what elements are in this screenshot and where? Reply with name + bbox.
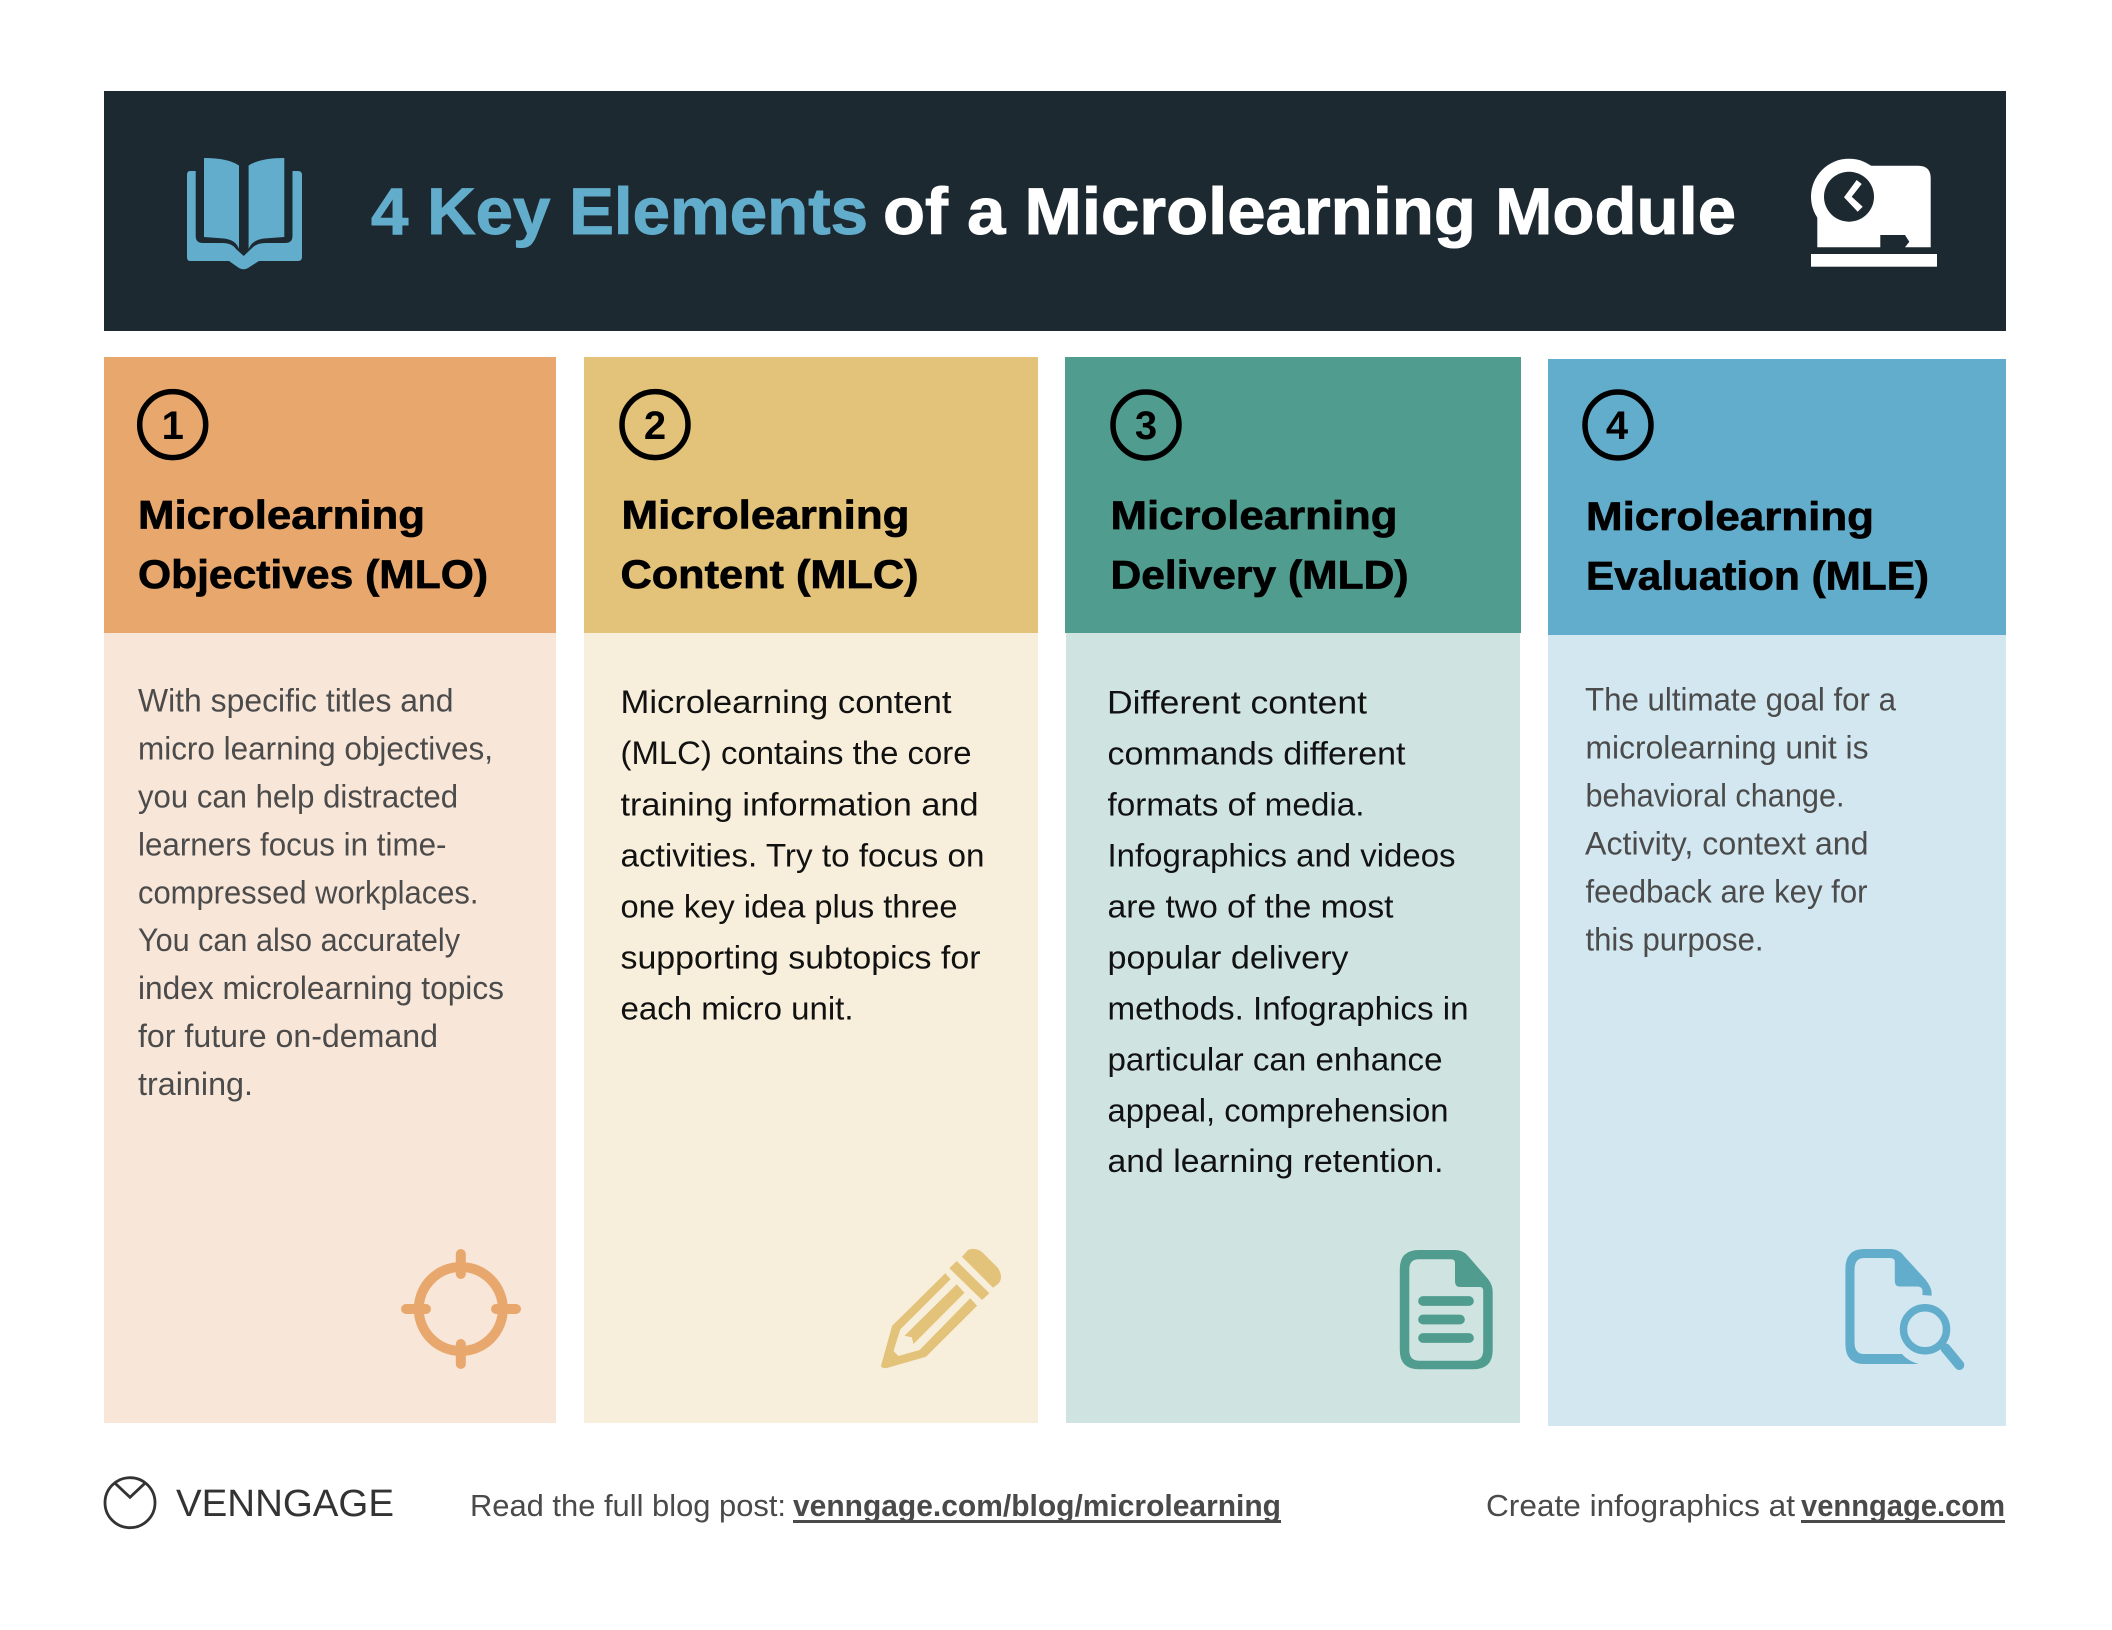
icon: document with magnifier	[1845, 1249, 1959, 1365]
number badge 3	[1113, 392, 1179, 458]
body text: objectives: You can also accurately	[138, 922, 460, 958]
body text: delivery: Infographics and videos	[1108, 837, 1456, 873]
heading: evaluation: Evaluation (MLE)	[1586, 554, 1929, 598]
body text: evaluation: behavioral change.	[1586, 778, 1844, 814]
body text: delivery: are two of the most	[1108, 888, 1394, 924]
body text: content: Microlearning content	[620, 684, 952, 720]
body text: delivery: commands different	[1108, 735, 1406, 771]
body text: evaluation: feedback are key for	[1586, 874, 1868, 910]
venngage logo	[105, 1478, 394, 1528]
number badge 2: 2	[644, 404, 666, 448]
body text: content: activities. Try to focus on	[620, 838, 984, 874]
title	[371, 174, 1736, 248]
number badge 2	[622, 392, 688, 458]
body text: delivery: methods. Infographics in	[1108, 990, 1468, 1026]
create link: Create infographics at	[1486, 1488, 1795, 1523]
heading: content: Content (MLC)	[620, 553, 918, 597]
blog post link: Read the full blog post:	[470, 1488, 786, 1523]
body text: delivery: Different content	[1107, 684, 1367, 720]
body text: content: each micro unit.	[620, 990, 854, 1026]
body text: objectives: micro learning objectives,	[138, 731, 493, 767]
heading: evaluation	[1586, 495, 1929, 598]
heading: delivery: Microlearning	[1110, 494, 1398, 538]
number badge 4: 4	[1606, 404, 1629, 448]
icon: target	[406, 1254, 516, 1364]
number badge 3: 3	[1135, 404, 1157, 448]
body text: objectives: you can help distracted	[138, 778, 458, 814]
body text: objectives: learners focus in time-	[138, 826, 446, 862]
icon: pencil	[881, 1249, 1001, 1368]
body text: delivery	[1107, 684, 1468, 1179]
create link: venngage.com	[1801, 1488, 2005, 1523]
body text: evaluation: this purpose.	[1586, 922, 1764, 958]
body text: objectives	[138, 683, 504, 1102]
heading: content	[620, 494, 918, 597]
icon: document	[1400, 1250, 1493, 1369]
body text: delivery: appeal, comprehension	[1108, 1092, 1448, 1128]
heading: objectives: Objectives (MLO)	[138, 553, 488, 597]
title: of a Microlearning Module	[883, 174, 1736, 248]
body text: delivery: formats of media.	[1108, 786, 1364, 822]
body text: objectives: index microlearning topics	[138, 970, 504, 1006]
panel: delivery	[1065, 357, 1521, 1423]
number badge 1: 1	[162, 404, 184, 448]
body text: content: (MLC) contains the core	[620, 735, 972, 771]
create link	[1486, 1488, 2005, 1523]
body text: objectives: compressed workplaces.	[138, 874, 478, 910]
body text: delivery: popular delivery	[1108, 939, 1348, 975]
heading: delivery	[1110, 494, 1408, 597]
body text: evaluation: microlearning unit is	[1586, 730, 1868, 766]
body text: content: training information and	[620, 786, 978, 822]
header banner	[104, 91, 2006, 331]
title: 4 Key Elements	[371, 174, 868, 248]
blog post link: venngage.com/blog/microlearning	[793, 1488, 1281, 1523]
number badge 1	[140, 392, 206, 458]
body text: evaluation	[1585, 682, 1896, 958]
body text: evaluation: Activity, context and	[1585, 826, 1868, 862]
body text: content: supporting subtopics for	[620, 940, 981, 976]
icon: clock and screen	[1811, 159, 1937, 267]
venngage logo: VENNGAGE	[176, 1483, 394, 1525]
body text: objectives: With specific titles and	[138, 683, 454, 719]
heading: objectives	[138, 494, 488, 597]
heading: content: Microlearning	[622, 494, 910, 538]
heading: objectives: Microlearning	[138, 494, 425, 538]
icon: open book	[187, 158, 302, 269]
body text: evaluation: The ultimate goal for a	[1585, 682, 1896, 718]
number badge 4	[1585, 392, 1651, 458]
heading: evaluation: Microlearning	[1586, 495, 1874, 539]
body text: objectives: training.	[138, 1066, 253, 1102]
body text: objectives: for future on-demand	[138, 1018, 438, 1054]
footer	[105, 1478, 2005, 1528]
panel: content	[584, 357, 1038, 1423]
panel: objectives	[104, 357, 556, 1423]
heading: delivery: Delivery (MLD)	[1110, 553, 1408, 597]
body text: delivery: and learning retention.	[1108, 1143, 1444, 1179]
body text: content: one key idea plus three	[620, 888, 958, 924]
panel: evaluation	[1548, 359, 2006, 1426]
body text: delivery: particular can enhance	[1108, 1041, 1442, 1077]
blog post link	[470, 1488, 1281, 1523]
body text: content	[620, 684, 984, 1026]
